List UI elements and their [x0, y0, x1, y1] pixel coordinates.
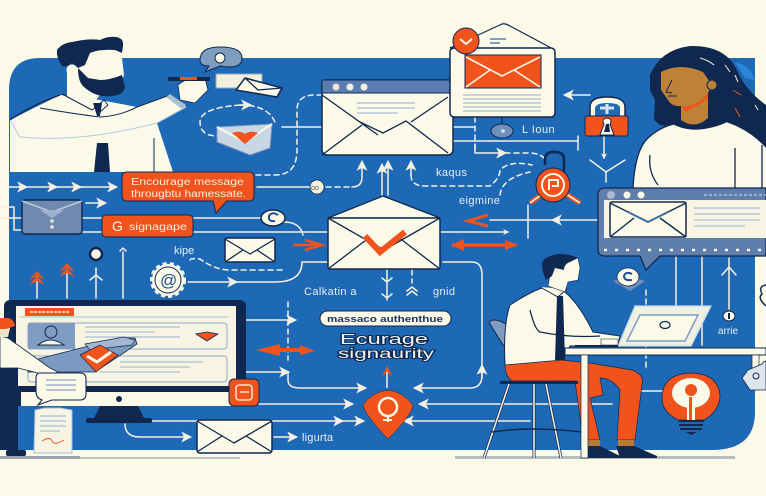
neck and face — [67, 50, 124, 105]
man pointing at envelopes — [10, 37, 210, 172]
button: signage: signagape — [129, 221, 187, 233]
stool — [500, 381, 578, 384]
window: envelope — [322, 80, 453, 155]
button: signage: G — [112, 218, 123, 234]
node and label: arrie: arrie — [718, 326, 738, 337]
label: eigmine: eigmine — [459, 195, 500, 207]
icon: small node with label: L Ioun — [522, 124, 555, 136]
icon: small badge above laptop — [613, 268, 645, 291]
icon: small envelope — [225, 238, 275, 262]
callout: encourage message: Encourage message — [131, 177, 245, 188]
icon: small envelopes — [216, 74, 282, 97]
person at monitor — [0, 318, 58, 456]
icon: C badge — [261, 210, 285, 226]
icon: document — [34, 408, 72, 453]
icon: speech bubble — [200, 47, 242, 72]
label: kaqus: kaqus — [436, 167, 467, 179]
callout: encourage message: througbtu hamessate. — [131, 189, 246, 200]
table — [565, 348, 766, 458]
floor shadow — [0, 456, 735, 459]
icon: slate envelope — [22, 200, 82, 234]
icon: key badge — [530, 152, 580, 203]
desktop monitor — [4, 300, 259, 423]
flow lines and arrows — [0, 95, 736, 437]
icon: right edge gadgets — [742, 285, 766, 390]
icon: small node — [310, 180, 324, 194]
node and label: arrie — [718, 311, 738, 337]
large envelope — [197, 420, 272, 453]
icon: @ gear: @ — [160, 271, 177, 290]
icon: chat bubble — [36, 373, 86, 405]
hair — [57, 37, 123, 68]
woman — [633, 46, 766, 188]
seated man at laptop — [484, 254, 657, 458]
label: Calkatin a: Calkatin a — [304, 286, 357, 298]
central envelope — [328, 196, 440, 269]
icon: heart envelope with loop — [217, 124, 272, 155]
callout: encourage message — [122, 172, 254, 213]
icon: orange pin — [363, 366, 413, 439]
heading: Ecurage signaurity: Ecurage — [340, 331, 428, 348]
pill: message authenthue: massaco authenthue — [327, 314, 443, 325]
chair back — [490, 320, 508, 345]
up arrows — [29, 248, 102, 285]
icon: orange padlock — [585, 97, 628, 136]
laptop — [575, 306, 711, 346]
beard — [78, 68, 125, 96]
orange arrows — [256, 215, 518, 356]
orange envelope card — [450, 24, 555, 117]
blue panel — [9, 58, 755, 450]
icon: @ gear — [152, 264, 184, 296]
heading: Ecurage signaurity — [338, 331, 434, 361]
icon: small node with label — [491, 117, 555, 138]
heading: Ecurage signaurity: signaurity — [338, 345, 434, 361]
window: envelope with speech tail — [598, 188, 766, 270]
label: ligurta: ligurta — [302, 432, 334, 444]
icon: light bulb — [662, 373, 720, 435]
icon: small node: oo — [311, 185, 319, 192]
label: gnid: gnid — [433, 286, 455, 298]
pill: message authenthue — [320, 311, 451, 326]
label: kipe: kipe — [174, 245, 194, 257]
button: signage — [102, 215, 193, 237]
